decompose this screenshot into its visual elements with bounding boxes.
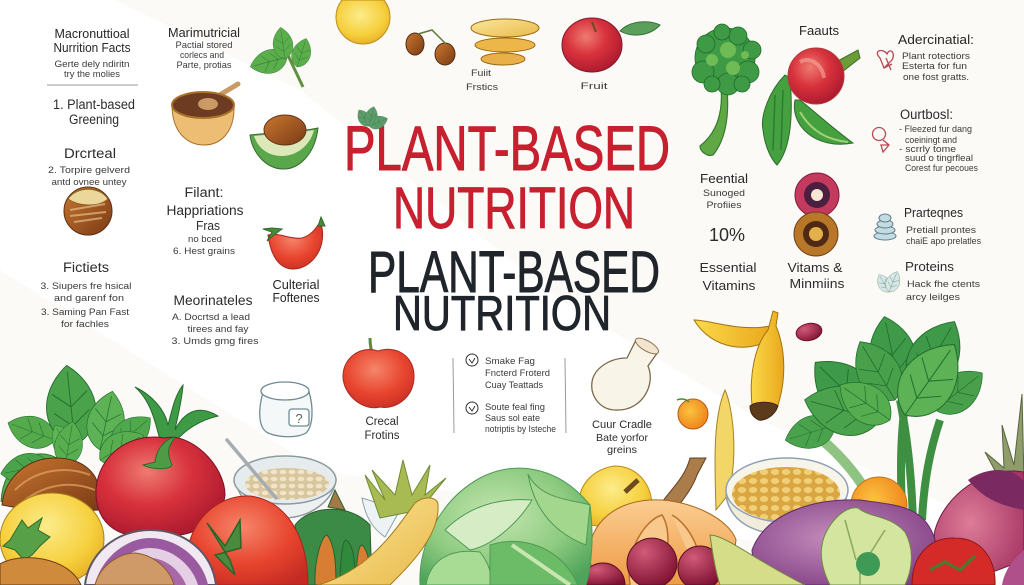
illustration: large leafy greens bbox=[781, 309, 994, 525]
illustration: yellow lemon bbox=[0, 493, 104, 585]
illustration: yellow apple bbox=[579, 466, 652, 530]
icon: outlined leaves bbox=[874, 269, 904, 295]
text block: essential vitamins bbox=[700, 260, 757, 293]
illustration: pale green pepper bbox=[821, 508, 911, 585]
text block: drcrteal: 2. Torpire gelverd bbox=[48, 165, 130, 176]
illustration: orange bbox=[851, 477, 907, 533]
text block: meorinateles: tirees and fay bbox=[188, 324, 249, 335]
text block: ourtbosl: Corest fur pecoues bbox=[905, 163, 978, 174]
text block: drcrteal: Drcrteal bbox=[64, 146, 116, 161]
text block: ourtbosl: coeiningt and bbox=[905, 135, 957, 146]
text block: feential profiles: Profiies bbox=[706, 200, 742, 211]
text block: adercinatial: one fost gratts. bbox=[903, 72, 969, 83]
icon: yellow lemon bbox=[336, 0, 390, 44]
icon: wooden bowl bbox=[172, 84, 238, 145]
text block: feential profiles: Sunoged bbox=[703, 188, 745, 199]
illustration: purple cabbage bbox=[752, 500, 935, 585]
text block: filant happriations bbox=[166, 185, 244, 257]
text block: proteins: arcy leilges bbox=[906, 292, 960, 303]
text block: checklist bbox=[453, 354, 566, 435]
text block: cuur cradle: greins bbox=[607, 444, 637, 456]
illustration: grain bowl right bbox=[726, 458, 848, 535]
icon: pasta grains bbox=[471, 19, 539, 65]
title: black plant-based nutrition bbox=[368, 239, 660, 341]
illustration: brown onion bbox=[2, 458, 100, 512]
text block: filant happriations: Happriations bbox=[166, 203, 244, 218]
text block: vitams and minerals bbox=[788, 260, 845, 291]
icon: white gourd vase bbox=[592, 335, 661, 410]
text block: fruit frstics bbox=[466, 68, 498, 93]
text block: fruit label: Fruit bbox=[580, 81, 608, 92]
text block: plant-based greening: 1. Plant-based bbox=[53, 97, 135, 112]
illustration: green banana bbox=[710, 535, 805, 585]
text block: meorinateles bbox=[172, 293, 259, 347]
title: black plant-based nutrition: PLANT-BASED bbox=[368, 239, 660, 305]
icon: stacked stones bbox=[874, 214, 896, 240]
text block: crecal frotins: Crecal bbox=[366, 416, 398, 428]
illustration: pumpkin bbox=[589, 458, 736, 585]
text block: marimutricial: corlecs and bbox=[180, 50, 224, 61]
text block: filant happriations: 6. Hest grains bbox=[173, 246, 235, 257]
text block: marimutricial: Pactial stored bbox=[176, 40, 232, 51]
text block: vitams and minerals: Minmiins bbox=[790, 276, 845, 291]
illustration: red onion half with walnut bbox=[85, 530, 216, 585]
icon: sprout on title bbox=[354, 105, 390, 132]
illustration: green squash bbox=[295, 490, 372, 585]
illustration: lettuce bbox=[420, 468, 592, 585]
text block: plant-based greening bbox=[53, 97, 135, 127]
text block: fictiets: and garenf fon bbox=[54, 293, 124, 304]
text block: prarteqnes: chaiE apo prelatles bbox=[906, 236, 981, 247]
icon: red bean bbox=[795, 321, 823, 343]
title: red plant-based nutrition: PLANT-BASED bbox=[344, 113, 670, 184]
text block: macronutrition facts: Macronuttioal bbox=[54, 27, 130, 41]
text block: checklist: Soute feal fing bbox=[485, 402, 545, 413]
text block: proteins: Hack fhe ctents bbox=[907, 279, 980, 290]
icon: coconut bbox=[64, 187, 112, 235]
text block: marimutricial: Parte, protias bbox=[176, 60, 232, 71]
text block: prarteqnes bbox=[904, 206, 981, 247]
text block: ourtbosl: suud o tingrfleal bbox=[905, 153, 973, 164]
icon: white jar: ? bbox=[295, 411, 303, 426]
text block: ourtbosl: - Fleezed fur dang bbox=[899, 124, 972, 135]
text block: marimutricial bbox=[168, 26, 240, 71]
text block: fictiets bbox=[40, 260, 132, 330]
text block: proteins: Proteins bbox=[905, 259, 954, 274]
text block: meorinateles: Meorinateles bbox=[174, 293, 253, 308]
text block: checklist: Smake Fag bbox=[485, 356, 535, 367]
icon: ring with arrow bbox=[872, 128, 889, 152]
title: red plant-based nutrition bbox=[344, 113, 670, 240]
text block: adercinatial: Adercinatial: bbox=[898, 33, 974, 47]
text block: prarteqnes: Pretiall prontes bbox=[906, 225, 976, 236]
text block: crecal frotins bbox=[364, 416, 400, 442]
text block: fictiets: for fachles bbox=[61, 319, 109, 330]
text block: essential vitamins: Vitamins bbox=[702, 278, 756, 293]
text block: filant happriations: no bced bbox=[188, 234, 222, 245]
text block: essential vitamins: Essential bbox=[700, 260, 757, 275]
text block: filant happriations: Fras bbox=[196, 219, 220, 233]
illustration: plant in white cup bbox=[362, 460, 446, 537]
text block: prarteqnes: Prarteqnes bbox=[904, 206, 963, 220]
illustration: pineapple crown bbox=[985, 394, 1024, 480]
text block: marimutricial: Marimutricial bbox=[168, 26, 240, 40]
text block: checklist: Fncterd Froterd bbox=[485, 368, 550, 379]
text block: meorinateles: 3. Umds gmg fires bbox=[172, 336, 259, 347]
text block: macronutrition facts: try the molies bbox=[64, 69, 120, 80]
title: black plant-based nutrition: NUTRITION bbox=[393, 287, 611, 341]
text block: adercinatial bbox=[898, 33, 974, 83]
text block: fruit frstics: Frstics bbox=[466, 82, 498, 93]
text block: plant-based greening: Greening bbox=[69, 112, 119, 127]
text block: faauts: Faauts bbox=[799, 24, 839, 38]
icon: heart ribbon bbox=[877, 51, 893, 70]
text block: drcrteal bbox=[48, 146, 130, 188]
text block: macronutrition facts bbox=[47, 27, 138, 85]
title: red plant-based nutrition: NUTRITION bbox=[393, 175, 635, 240]
illustration: tomato bbox=[188, 496, 308, 585]
icon: red pepper bbox=[263, 217, 325, 269]
illustration: purple edge bottom right bbox=[1002, 550, 1024, 585]
text block: checklist: Saus sol eate bbox=[485, 413, 540, 424]
text block: adercinatial: Plant rotectiors bbox=[902, 51, 970, 62]
icon: white jar bbox=[260, 382, 312, 437]
icon: small orange bbox=[677, 399, 708, 429]
text block: proteins bbox=[905, 259, 980, 303]
illustration: leaves top left bbox=[0, 363, 160, 519]
illustration: large red apple with sprout bbox=[96, 385, 225, 536]
text block: ourtbosl: Ourtbosl: bbox=[900, 107, 953, 122]
icon: banana bbox=[694, 311, 784, 420]
text block: cuur cradle: Cuur Cradle bbox=[592, 419, 652, 431]
illustration: long yellow banana bbox=[318, 498, 438, 585]
text block: culterial foftenes bbox=[272, 278, 320, 305]
text block: drcrteal: antd ovnee untey bbox=[52, 177, 127, 188]
text block: filant happriations: Filant: bbox=[184, 185, 224, 200]
text block: ourtbosl bbox=[899, 107, 978, 174]
text block: meorinateles: A. Docrtsd a lead bbox=[172, 312, 250, 323]
icon: red fruit bbox=[562, 18, 660, 72]
text block: crecal frotins: Frotins bbox=[364, 430, 400, 442]
illustration: cherries bbox=[581, 538, 722, 585]
text block: cuur cradle bbox=[592, 419, 652, 456]
stat: 10 percent: 10% bbox=[709, 225, 745, 245]
icon: dates bbox=[406, 30, 455, 65]
icon: sliced fruits bbox=[794, 173, 839, 256]
text block: culterial foftenes: Culterial bbox=[272, 278, 320, 292]
icon: corn leaf bbox=[715, 390, 734, 510]
illustration: red tomato right bbox=[912, 538, 995, 585]
text block: culterial foftenes: Foftenes bbox=[272, 291, 320, 305]
text block: fruit frstics: Fuiit bbox=[471, 68, 491, 79]
illustration: brown fruit bottom left bbox=[0, 558, 81, 585]
text block: adercinatial: Esterta for fun bbox=[902, 61, 967, 72]
icon: green leaf sprig bbox=[247, 26, 315, 87]
text block: checklist: Cuay Teattads bbox=[485, 380, 543, 391]
text block: fictiets: 3. Saming Pan Fast bbox=[41, 307, 129, 318]
text block: checklist: notriptis by Isteche bbox=[485, 424, 556, 435]
text block: macronutrition facts: Nurrition Facts bbox=[54, 41, 130, 55]
text block: fictiets: Fictiets bbox=[63, 260, 109, 275]
text block: feential profiles bbox=[700, 172, 748, 211]
icon: broccoli bbox=[692, 24, 761, 155]
icon: avocado bbox=[250, 115, 318, 169]
text block: vitams and minerals: Vitams & bbox=[788, 260, 843, 275]
text block: cuur cradle: Bate yorfor bbox=[596, 432, 649, 444]
text block: fictiets: 3. Siupers fre hsical bbox=[40, 281, 132, 292]
text block: macronutrition facts: Gerte dely ndiritn bbox=[54, 59, 130, 70]
icon: red apple centre bbox=[343, 338, 414, 408]
illustration: cereal bowl with spoon bbox=[227, 440, 336, 518]
icon: red onion with pods bbox=[762, 48, 860, 165]
text block: feential profiles: Feential bbox=[700, 172, 748, 186]
illustration: dragon fruit bbox=[934, 470, 1024, 575]
text block: ourtbosl: - scrrly tome bbox=[899, 144, 956, 155]
